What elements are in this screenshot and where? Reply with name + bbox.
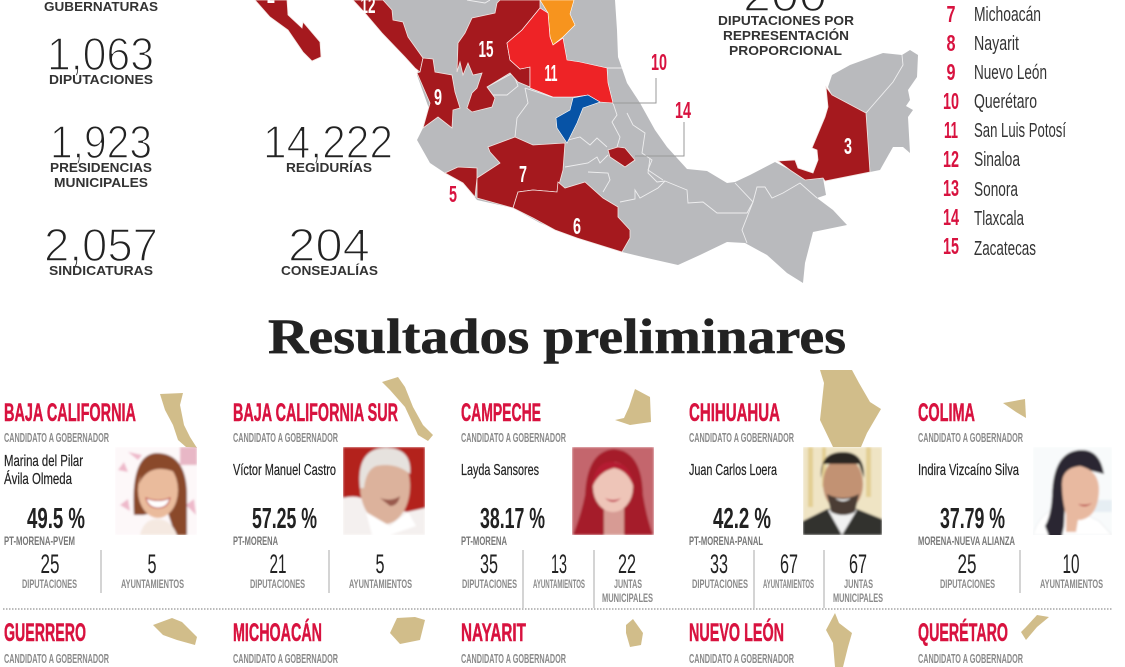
heading: QUERÉTARO — [918, 618, 1008, 647]
map: Yucatán peninsula — [828, 50, 918, 172]
diputaciones count: 21 — [270, 549, 286, 579]
heading: NAYARIT — [461, 619, 526, 647]
diputaciones count: DIPUTACIONES — [250, 579, 305, 591]
panel: Querétaro — [918, 615, 1049, 666]
juntas municipales count — [602, 549, 653, 605]
map numbers: 15 — [478, 36, 494, 62]
panel: Nayarit — [461, 619, 643, 666]
coalition: PT-MORENA-PVEM — [4, 534, 75, 548]
legend: states list: 9 — [946, 59, 956, 85]
diputaciones count: DIPUTACIONES — [940, 579, 995, 591]
legend: states list — [943, 1, 1066, 260]
legend: states list: Nuevo León — [974, 62, 1047, 84]
candidate name: Juan Carlos Loera — [689, 462, 777, 479]
candidate name: Indira Vizcaíno Silva — [918, 462, 1019, 479]
legend: states list: 12 — [943, 146, 959, 172]
state silhouette: Michoacán — [390, 617, 425, 644]
coalition: PT-MORENA — [461, 534, 507, 548]
state silhouette: Baja California Sur — [382, 377, 433, 441]
ayuntamientos count — [1040, 549, 1103, 591]
state silhouette: Querétaro — [1021, 615, 1049, 640]
label: candidato: CANDIDATO A GOBERNADOR — [4, 652, 109, 666]
legend: states list: 13 — [943, 175, 959, 201]
legend: states list: Sinaloa — [974, 149, 1021, 171]
vote share: 57.25 % — [252, 503, 317, 535]
stat: diputaciones: 1,063 — [47, 28, 154, 80]
ayuntamientos count — [763, 549, 814, 591]
coalition: PT-MORENA — [233, 534, 278, 548]
ayuntamientos count: AYUNTAMIENTOS — [763, 579, 814, 591]
map: Michoacán — [477, 137, 565, 208]
coalition: PT-MORENA-PANAL — [689, 534, 763, 548]
title: Resultados preliminares — [268, 308, 846, 364]
legend: states list: Michoacán — [974, 4, 1041, 26]
legend: states list: Querétaro — [974, 91, 1037, 113]
diputaciones count — [940, 549, 995, 591]
juntas municipales count: MUNICIPALES — [833, 593, 883, 605]
candidate name: Layda Sansores — [461, 462, 539, 479]
state silhouette: Nuevo León — [826, 613, 852, 667]
legend: states list: Tlaxcala — [974, 208, 1025, 230]
candidate name: Marina del Pilar — [4, 453, 83, 470]
juntas municipales count: JUNTAS — [844, 579, 873, 591]
map of Mexico — [255, 0, 918, 283]
label: candidato: CANDIDATO A GOBERNADOR — [689, 652, 794, 666]
juntas municipales count: JUNTAS — [614, 579, 642, 591]
legend: states list: 11 — [944, 117, 958, 143]
candidate photo — [803, 447, 882, 535]
label: candidato: CANDIDATO A GOBERNADOR — [461, 431, 566, 445]
juntas municipales count: MUNICIPALES — [602, 593, 653, 605]
diputaciones count: DIPUTACIONES — [692, 579, 748, 591]
leader line: Querétaro — [613, 78, 656, 103]
stat: presidencias municipales: PRESIDENCIAS — [50, 160, 152, 175]
ayuntamientos count: AYUNTAMIENTOS — [121, 579, 184, 591]
panel: Nuevo León — [689, 613, 852, 667]
legend: states list: Zacatecas — [974, 238, 1036, 260]
stat: regidurías: REGIDURÍAS — [286, 160, 372, 175]
panel: Baja California — [4, 393, 197, 593]
coalition: MORENA-NUEVA ALIANZA — [918, 534, 1015, 548]
ayuntamientos count: 13 — [551, 549, 567, 579]
map numbers: 5 — [449, 181, 457, 207]
state silhouette: Chihuahua — [820, 370, 881, 447]
ayuntamientos count: 10 — [1062, 549, 1080, 579]
heading: CHIHUAHUA — [689, 399, 780, 427]
ayuntamientos count — [533, 549, 585, 591]
map numbers: 6 — [573, 213, 581, 239]
label: candidato: CANDIDATO A GOBERNADOR — [4, 431, 109, 445]
diputaciones count: DIPUTACIONES — [22, 579, 77, 591]
map: Tlaxcala — [608, 147, 635, 167]
vote share: 49.5 % — [27, 503, 85, 535]
ayuntamientos count — [121, 549, 184, 591]
vote share: 42.2 % — [713, 503, 771, 535]
map numbers: 7 — [519, 161, 527, 187]
diputaciones count: 25 — [958, 549, 976, 579]
label: candidato: CANDIDATO A GOBERNADOR — [918, 431, 1023, 445]
legend: states list: 14 — [943, 204, 959, 230]
diputaciones count — [22, 549, 77, 591]
stat: diputaciones por representación proporcional: PROPORCIONAL — [729, 43, 842, 58]
map numbers: 11 — [544, 60, 558, 86]
ayuntamientos count: AYUNTAMIENTOS — [533, 579, 585, 591]
ayuntamientos count — [349, 549, 412, 591]
legend: states list: 7 — [946, 1, 956, 27]
label: candidato: CANDIDATO A GOBERNADOR — [461, 652, 566, 666]
candidate photo — [343, 447, 425, 535]
ayuntamientos count: 5 — [376, 549, 384, 579]
heading: BAJA CALIFORNIA SUR — [233, 399, 398, 427]
map: Baja California Sur — [255, 0, 321, 61]
diputaciones count: 33 — [710, 549, 728, 579]
legend: states list: Sonora — [974, 179, 1019, 201]
stat: consejalías: CONSEJALÍAS — [281, 263, 378, 278]
legend: states list: San Luis Potosí — [974, 120, 1066, 142]
stat: diputaciones por representación proporcional — [718, 0, 855, 58]
heading: MICHOACÁN — [233, 618, 322, 647]
candidate name: Ávila Olmeda — [4, 469, 72, 488]
map: Zacatecas — [457, 0, 540, 112]
ayuntamientos count: 5 — [148, 549, 156, 579]
legend: states list: Nayarit — [974, 33, 1019, 55]
map: Colima — [445, 167, 477, 197]
state silhouette: Nayarit — [626, 619, 643, 647]
panel: Guerrero — [4, 618, 197, 666]
candidate photo — [115, 447, 197, 535]
map: Sinaloa — [353, 0, 423, 72]
panel: Colima — [918, 399, 1112, 593]
candidate photo — [572, 447, 654, 535]
juntas municipales count: 67 — [849, 549, 867, 579]
juntas municipales count — [833, 549, 883, 605]
map numbers: 9 — [434, 84, 442, 110]
stat: consejalías: 204 — [288, 219, 370, 271]
map: state borders — [467, 0, 903, 243]
candidate name: Víctor Manuel Castro — [233, 462, 336, 479]
stat: presidencias municipales: 1,923 — [50, 116, 152, 168]
map: Campeche — [778, 87, 870, 181]
label: candidato: CANDIDATO A GOBERNADOR — [233, 431, 338, 445]
stat: presidencias municipales: MUNICIPALES — [54, 175, 148, 190]
heading: NUEVO LEÓN — [689, 617, 784, 647]
heading: COLIMA — [918, 399, 975, 427]
legend: states list: 10 — [943, 88, 959, 114]
ayuntamientos count: AYUNTAMIENTOS — [349, 579, 412, 591]
map: Guerrero — [513, 182, 630, 252]
map: Querétaro — [556, 95, 600, 143]
heading: CAMPECHE — [461, 399, 541, 427]
label: candidato: CANDIDATO A GOBERNADOR — [233, 652, 338, 666]
label: candidato: CANDIDATO A GOBERNADOR — [689, 431, 794, 445]
stat: diputaciones por representación proporcional: DIPUTACIONES POR — [718, 13, 855, 28]
panel: Chihuahua — [689, 370, 883, 608]
state silhouette: Campeche — [615, 389, 651, 425]
map: Nuevo León — [540, 0, 575, 45]
panel: Michoacán — [233, 617, 425, 666]
vote share: 37.79 % — [940, 503, 1005, 535]
label: candidato: CANDIDATO A GOBERNADOR — [918, 652, 1023, 666]
legend: states list: 15 — [943, 233, 959, 259]
diputaciones count: 35 — [480, 549, 498, 579]
stat: sindicaturas: 2,057 — [44, 219, 158, 271]
map numbers — [267, 0, 852, 239]
candidate name — [4, 453, 83, 488]
map numbers: 14 — [675, 97, 691, 123]
stat: presidencias municipales — [50, 116, 152, 190]
leader line: Tlaxcala — [635, 122, 684, 156]
panel: Campeche — [461, 389, 654, 608]
state silhouette: Guerrero — [153, 618, 197, 645]
legend: states list: 8 — [946, 30, 956, 56]
stat: sindicaturas: SINDICATURAS — [49, 263, 153, 278]
stat: regidurías: 14,222 — [263, 116, 393, 168]
diputaciones count — [462, 549, 517, 591]
map numbers: 3 — [844, 133, 852, 159]
diputaciones count: 25 — [40, 549, 60, 579]
map: mainland base — [353, 0, 847, 283]
map: San Luis Potosí — [507, 8, 613, 103]
state silhouette: Colima — [1003, 399, 1026, 418]
diputaciones count — [250, 549, 305, 591]
stat: diputaciones: DIPUTACIONES — [49, 72, 153, 87]
state silhouette: Baja California — [160, 393, 197, 448]
heading: GUERRERO — [4, 619, 86, 647]
map: Nayarit — [417, 58, 460, 128]
candidate photo — [1034, 448, 1112, 535]
stat: diputaciones por representación proporcional: REPRESENTACIÓN — [723, 28, 849, 43]
stat: consejalías — [281, 219, 378, 278]
map numbers: 10 — [651, 49, 667, 75]
juntas municipales count: 22 — [618, 549, 636, 579]
diputaciones count — [692, 549, 748, 591]
heading: BAJA CALIFORNIA — [4, 399, 136, 427]
ayuntamientos count: 67 — [780, 549, 798, 579]
panel: national totals — [44, 0, 855, 278]
diputaciones count: DIPUTACIONES — [462, 579, 517, 591]
panel: Baja California Sur — [233, 377, 433, 593]
vote share: 38.17 % — [480, 503, 545, 535]
